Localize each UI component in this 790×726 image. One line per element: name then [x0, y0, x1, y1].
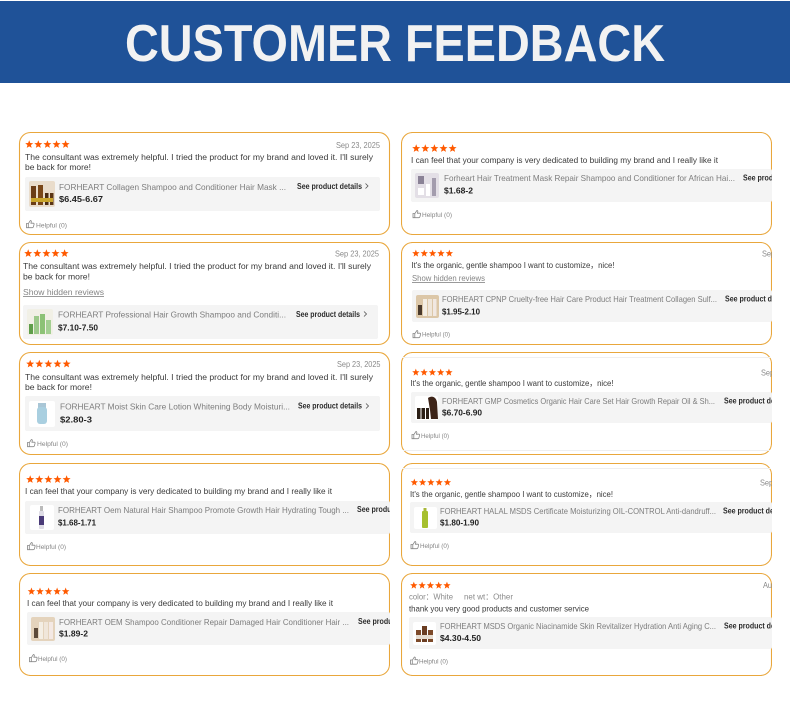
title: CUSTOMER FEEDBACK — [125, 15, 665, 73]
see product details link: See product details — [298, 402, 362, 410]
product box — [410, 502, 772, 533]
review text: I can feel that your company is very dedicated to building my brand and I really like it — [411, 155, 719, 165]
helpful count: Helpful (0) — [422, 212, 452, 219]
icon: chevron — [366, 184, 368, 188]
panel: review card right 4 — [402, 464, 790, 566]
review text: be back for more! — [23, 272, 90, 282]
price: $7.10-7.50 — [58, 322, 98, 332]
review text: I can feel that your company is very dedicated to building my brand and I really like it — [27, 598, 334, 608]
icon: thumbs up — [410, 657, 418, 664]
review text: I can feel that your company is very dedicated to building my brand and I really like it — [25, 486, 333, 496]
icon: product thumbnail — [29, 181, 55, 207]
see product details link: See product details — [358, 617, 423, 626]
icon: thumbs up — [412, 432, 420, 439]
price: $1.68-1.71 — [58, 518, 96, 528]
icon: product thumbnail — [30, 505, 54, 530]
icon: product thumbnail — [27, 309, 53, 335]
panel: review card left 1 — [20, 132, 390, 234]
icon: product thumbnail — [416, 295, 439, 318]
review text: thank you very good products and customer service — [409, 604, 589, 614]
price: $4.30-4.50 — [440, 633, 481, 643]
star rating — [412, 369, 453, 376]
panel: review card right 1 — [402, 132, 790, 234]
panel: review card right 5 — [402, 574, 790, 676]
header banner — [0, 1, 790, 83]
star rating — [28, 588, 69, 595]
icon: product thumbnail — [415, 396, 438, 420]
see product details link: See product details — [357, 505, 422, 514]
product attributes: net wt：Other — [464, 592, 513, 602]
show hidden reviews link: Show hidden reviews — [23, 288, 104, 297]
panel: review card right 3 — [402, 352, 790, 454]
icon: thumbs up — [413, 331, 421, 338]
icon: thumbs up — [26, 221, 34, 228]
show hidden reviews link: Show hidden reviews — [412, 274, 485, 283]
icon: product thumbnail — [29, 401, 55, 427]
product box — [409, 617, 772, 649]
icon: product thumbnail — [414, 507, 437, 529]
product box — [25, 501, 390, 534]
star rating — [412, 144, 457, 152]
review text: It's the organic, gentle shampoo I want to customize，nice! — [410, 489, 613, 499]
price: $1.89-2 — [59, 628, 88, 638]
price: $1.68-2 — [444, 186, 473, 196]
panel: review card left 4 — [20, 464, 422, 566]
icon: thumbs up — [28, 440, 35, 447]
review text: It's the organic, gentle shampoo I want to customize，nice! — [410, 378, 614, 388]
panel: review card left 2 — [20, 242, 390, 344]
icon: thumbs up — [411, 542, 419, 549]
product name: Forheart Hair Treatment Mask Repair Shampoo and Conditioner for African Hai... — [444, 173, 735, 183]
review text: be back for more! — [25, 382, 92, 392]
icon: product thumbnail — [415, 173, 439, 198]
product box — [411, 169, 772, 202]
see product details link: See product details — [296, 310, 360, 319]
helpful count: Helpful (0) — [37, 441, 68, 448]
review date: Sep 23, 2025 — [335, 250, 379, 258]
product name: FORHEART OEM Shampoo Conditioner Repair Damaged Hair Conditioner Hair ... — [59, 617, 349, 627]
star rating — [24, 249, 69, 257]
icon: thumbs up — [28, 543, 35, 550]
product name: FORHEART Oem Natural Hair Shampoo Promote Growth Hair Hydrating Tough ... — [58, 505, 349, 515]
helpful count: Helpful (0) — [36, 544, 66, 551]
star rating — [25, 140, 70, 148]
review text: The consultant was extremely helpful. I tried the product for my brand and loved it. I'll surely — [23, 261, 372, 271]
helpful count: Helpful (0) — [420, 543, 449, 550]
product attributes: color：White — [409, 592, 453, 602]
price: $2.80-3 — [60, 414, 92, 424]
product name: FORHEART Moist Skin Care Lotion Whitening Body Moisturi... — [60, 402, 290, 412]
helpful count: Helpful (0) — [421, 433, 449, 440]
review text: It's the organic, gentle shampoo I want to customize，nice! — [412, 260, 614, 270]
panel: review card left 3 — [20, 352, 390, 454]
helpful count: Helpful (0) — [36, 222, 67, 230]
product name: FORHEART MSDS Organic Niacinamide Skin Revitalizer Hydration Anti Aging C... — [440, 621, 716, 631]
review text: The consultant was extremely helpful. I tried the product for my brand and loved it. I'll surely — [25, 372, 374, 382]
product name: FORHEART Collagen Shampoo and Conditioner Hair Mask ... — [59, 182, 286, 192]
panel: review card left 5 — [20, 574, 423, 676]
helpful count: Helpful (0) — [422, 332, 450, 338]
star rating — [26, 360, 71, 367]
product name: FORHEART HALAL MSDS Certificate Moisturizing OIL-CONTROL Anti-dandruff... — [440, 506, 716, 516]
review text: be back for more! — [25, 162, 91, 172]
product box — [412, 290, 772, 322]
panel: review card right 2 — [402, 242, 790, 344]
star rating — [411, 479, 451, 486]
star rating — [410, 582, 451, 589]
price: $6.70-6.90 — [442, 408, 482, 418]
price: $1.80-1.90 — [440, 518, 479, 528]
icon: thumbs up — [413, 211, 421, 218]
price: $6.45-6.67 — [59, 194, 103, 204]
icon: thumbs up — [30, 655, 37, 662]
review text: The consultant was extremely helpful. I tried the product for my brand and loved it. I'll surely — [25, 152, 374, 162]
star rating — [26, 475, 71, 483]
product box — [411, 392, 772, 423]
product box — [27, 612, 390, 645]
product box — [23, 305, 378, 339]
icon: chevron — [366, 404, 368, 408]
product name: FORHEART CPNP Cruelty-free Hair Care Product Hair Treatment Collagen Sulf... — [442, 294, 717, 304]
product name: FORHEART Professional Hair Growth Shampoo and Conditi... — [58, 310, 286, 320]
price: $1.95-2.10 — [442, 306, 480, 316]
star rating — [412, 250, 453, 257]
product box — [25, 177, 380, 211]
product box — [25, 396, 380, 431]
icon: chevron — [364, 312, 366, 316]
helpful count: Helpful (0) — [38, 656, 67, 663]
review date: Sep 23, 2025 — [337, 360, 381, 369]
see product details link: See product details — [297, 182, 362, 191]
product name: FORHEART GMP Cosmetics Organic Hair Care Set Hair Growth Repair Oil & Sh... — [442, 396, 715, 406]
icon: product thumbnail — [31, 617, 55, 641]
helpful count: Helpful (0) — [419, 658, 448, 666]
icon: product thumbnail — [413, 622, 436, 645]
review date: Sep 23, 2025 — [336, 141, 380, 150]
